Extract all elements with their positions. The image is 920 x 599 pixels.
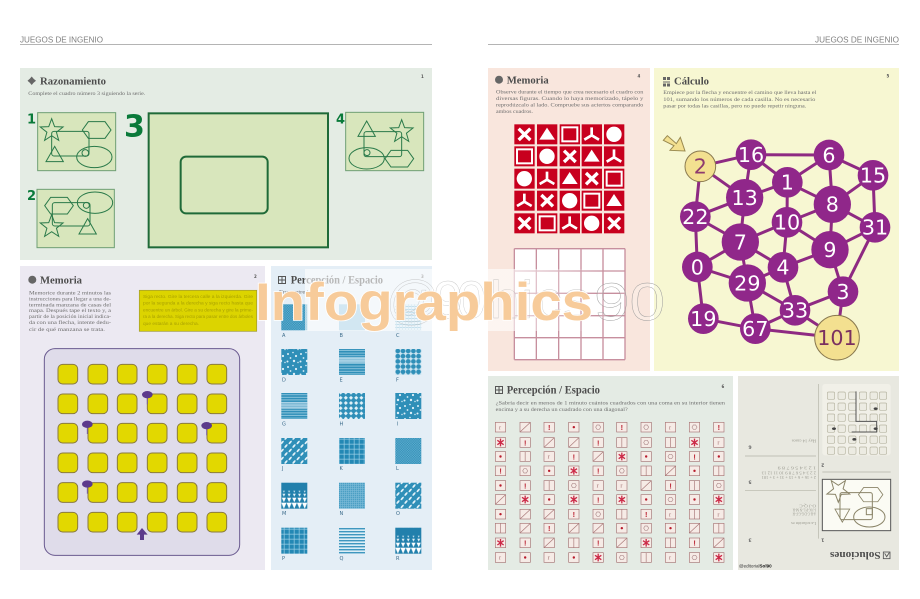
pattern tiles: J (281, 466, 283, 472)
solution numbers: 3 (748, 537, 752, 543)
pattern tiles: C (396, 333, 400, 339)
instruction text: da con una flecha, intente dedu- (29, 319, 111, 326)
arrow: start position (137, 528, 148, 540)
node numbers: 1 (781, 171, 794, 195)
solution texts: I-J K-P L-N M-R (793, 507, 816, 512)
running header right: JUEGOS DE INGENIO (815, 36, 899, 44)
instruction text (663, 89, 817, 110)
panel: memoria left (20, 266, 265, 570)
panel: razonamiento (20, 68, 432, 260)
instruction text: terminada manzana de casas del (29, 302, 112, 308)
symbol grid (495, 422, 724, 562)
solution numbers: 1 (821, 537, 824, 543)
callout: yellow directions: encuentre un árbol. Gire a su derecha y gire la prime- (143, 307, 254, 312)
solution texts: La solución es (791, 521, 816, 526)
panel: soluciones (738, 376, 899, 570)
node numbers: 9 (823, 238, 837, 262)
pattern tiles: L (396, 466, 399, 472)
network links (695, 155, 875, 338)
instruction text: Memorice durante 2 minutos las (29, 290, 111, 296)
box 2 (37, 189, 114, 248)
pattern tiles: G (282, 422, 286, 428)
solution 2: map (822, 384, 891, 455)
node numbers: 67 (742, 317, 768, 341)
empty grid (514, 249, 625, 360)
number 2: 2 (27, 189, 36, 204)
page number 5: 5 (886, 74, 890, 78)
watermark: ghost outline: hics (490, 271, 590, 330)
watermark: ghost outline: @90 (386, 271, 486, 330)
node numbers: 13 (732, 186, 758, 210)
node numbers: 101 (817, 326, 857, 350)
box 3 with empty rounded square (149, 113, 328, 247)
panel: percepcion espacio right (488, 376, 733, 570)
callout: yellow directions: que estarán a su derecha. (143, 321, 199, 326)
icon: four squares (278, 276, 286, 284)
solution texts: O-J Q-C (799, 503, 816, 508)
watermark: ghost outline (386, 271, 590, 330)
node numbers: 0 (691, 255, 704, 279)
callout: yellow directions: por la segunda a la derecha y siga recto hasta que (143, 301, 254, 306)
instruction text: cir de qué manzana se trata. (29, 327, 105, 333)
instruction text: ¿Sabría decir en menos de 1 minuto cuántos cuadrados con una coma en su interior tienen (496, 400, 725, 406)
node numbers: 10 (774, 211, 800, 235)
pattern tiles: D (282, 378, 286, 384)
node numbers: 6 (822, 143, 836, 167)
instruction text: mapa. Después tape el texto y, a (29, 308, 112, 314)
pattern tiles: O (396, 511, 400, 517)
trees (82, 391, 212, 494)
node numbers: 33 (782, 299, 808, 323)
heading: memoria: Memoria (40, 275, 82, 287)
solution numbers: 6 (748, 443, 752, 449)
watermark band (305, 269, 600, 331)
instruction text (496, 90, 644, 115)
node numbers: 3 (836, 280, 850, 304)
number network (663, 136, 890, 360)
solution texts: 2 + 16 + 6 + 15 + 31 + 3 + 101 (762, 475, 816, 480)
figure grid (514, 124, 624, 233)
heading: percepcion espacio: Percepción / Espacio (507, 383, 600, 397)
pattern tiles: K (340, 466, 344, 472)
node numbers: 15 (860, 164, 886, 188)
dividers (745, 384, 891, 539)
instruction text (496, 400, 725, 413)
instruction text: 101, sumando los números de cada casilla. No es necesario (663, 97, 816, 103)
icon: circle (495, 76, 503, 84)
instruction text: reprodúzcalo al lado. Compruebe sus aciertos comparando (496, 102, 644, 108)
node numbers: 19 (690, 307, 716, 331)
page number 3: 3 (421, 274, 424, 279)
page number 6: 6 (722, 384, 724, 389)
panel: calculo (654, 68, 899, 371)
node numbers: 2 (694, 155, 707, 179)
pattern tiles: E (340, 378, 343, 384)
callout: yellow directions: Siga recto. Gire la tercera calle a la izquierda. Gire (143, 294, 254, 299)
icon: four squares (496, 386, 502, 394)
node numbers: 4 (776, 256, 790, 280)
node numbers: 16 (738, 143, 764, 167)
instruction text: ambos cuadros. (496, 109, 533, 115)
heading: percepcion espacio: Percepción / Espacio (291, 275, 383, 287)
instruction text: diversas figuras. Cuando lo haya memorizado, tápelo y (496, 95, 644, 102)
heading: calculo: Cálculo (674, 76, 709, 88)
node numbers: 7 (734, 230, 747, 254)
box 4 (346, 112, 424, 171)
pattern tiles: H (340, 422, 344, 428)
icon: check box (883, 552, 890, 559)
running header left: JUEGOS DE INGENIO (20, 36, 103, 44)
arrow: start (663, 136, 685, 151)
heading: soluciones upside down: Soluciones (830, 549, 881, 561)
instruction text: partir de la posición inicial indica- (29, 314, 111, 320)
heading: memoria: Memoria (507, 74, 549, 86)
node numbers: 29 (734, 271, 760, 295)
pattern tiles: P (282, 556, 285, 562)
number 4: 4 (336, 112, 345, 128)
node numbers: 8 (826, 193, 839, 217)
number 3: 3 (124, 110, 145, 145)
instruction text: Complete el cuadro número 3 siguiendo la serie. (28, 91, 145, 97)
series boxes (37, 112, 424, 248)
solution texts: 1 2 3 4 5 6 7 8 9 (778, 466, 816, 471)
node numbers: 22 (682, 205, 708, 229)
solution numbers (748, 443, 824, 543)
instruction text: Empiece por la flecha y encuentre el camino que lleva hasta el (663, 89, 817, 96)
network nodes (680, 139, 890, 360)
instruction text: pasar por todas las casillas, pero no puede repetir ninguna. (663, 104, 806, 110)
page number 4: 4 (638, 74, 640, 78)
number 1: 1 (27, 112, 36, 128)
pattern tiles: Q (340, 556, 344, 562)
pattern tiles: B (340, 333, 344, 339)
map blocks (58, 364, 227, 532)
street map (44, 349, 240, 555)
pattern tiles: N (340, 511, 344, 517)
instruction text: encima y a su derecha un cuadrado con una diagonal? (496, 407, 629, 413)
pattern tiles (281, 304, 421, 562)
page number 1: 1 (421, 74, 424, 79)
box 1 (38, 113, 116, 171)
solution texts (762, 438, 816, 526)
callout: yellow directions (139, 290, 257, 331)
solution texts: 2 2 3 4 5 6 7 8 9 10 11 12 13 (762, 470, 816, 475)
icon: circle (28, 276, 36, 284)
panel: memoria right (488, 68, 650, 371)
watermark: infographics: Infographics (255, 273, 593, 332)
pattern tiles: A (282, 333, 286, 339)
instruction text: Observe durante el tiempo que crea necesario el cuadro con (496, 90, 644, 96)
instruction text: Encuentre las (279, 290, 314, 296)
icon: calculator (663, 77, 670, 86)
instruction text (29, 290, 112, 333)
heading: razonamiento: Razonamiento (40, 76, 106, 88)
instruction text: instrucciones para llegar a una de- (29, 296, 111, 302)
publisher credit: @editorialSol90 (739, 563, 772, 568)
solution numbers: 2 (821, 462, 824, 468)
pattern tiles: M (282, 511, 286, 517)
pattern tiles: F (396, 378, 399, 384)
solution texts: Hay 14 casos (791, 438, 816, 443)
icon: diamond (28, 76, 36, 85)
panel: percepcion espacio left (271, 266, 432, 570)
watermark: 90 outline: 90 (594, 273, 665, 332)
solution texts: A-B C-D E-G F-H (793, 511, 816, 516)
pattern tiles: R (396, 556, 400, 562)
solution 1: figure (822, 479, 891, 531)
node numbers (682, 143, 888, 350)
solution numbers: 5 (748, 478, 752, 484)
pattern tiles: I (397, 422, 398, 428)
node numbers: 31 (862, 216, 888, 240)
callout: yellow directions: ra a la derecha. Siga recto para pasar entre dos árboles (143, 314, 254, 319)
page number 2: 2 (254, 274, 257, 279)
